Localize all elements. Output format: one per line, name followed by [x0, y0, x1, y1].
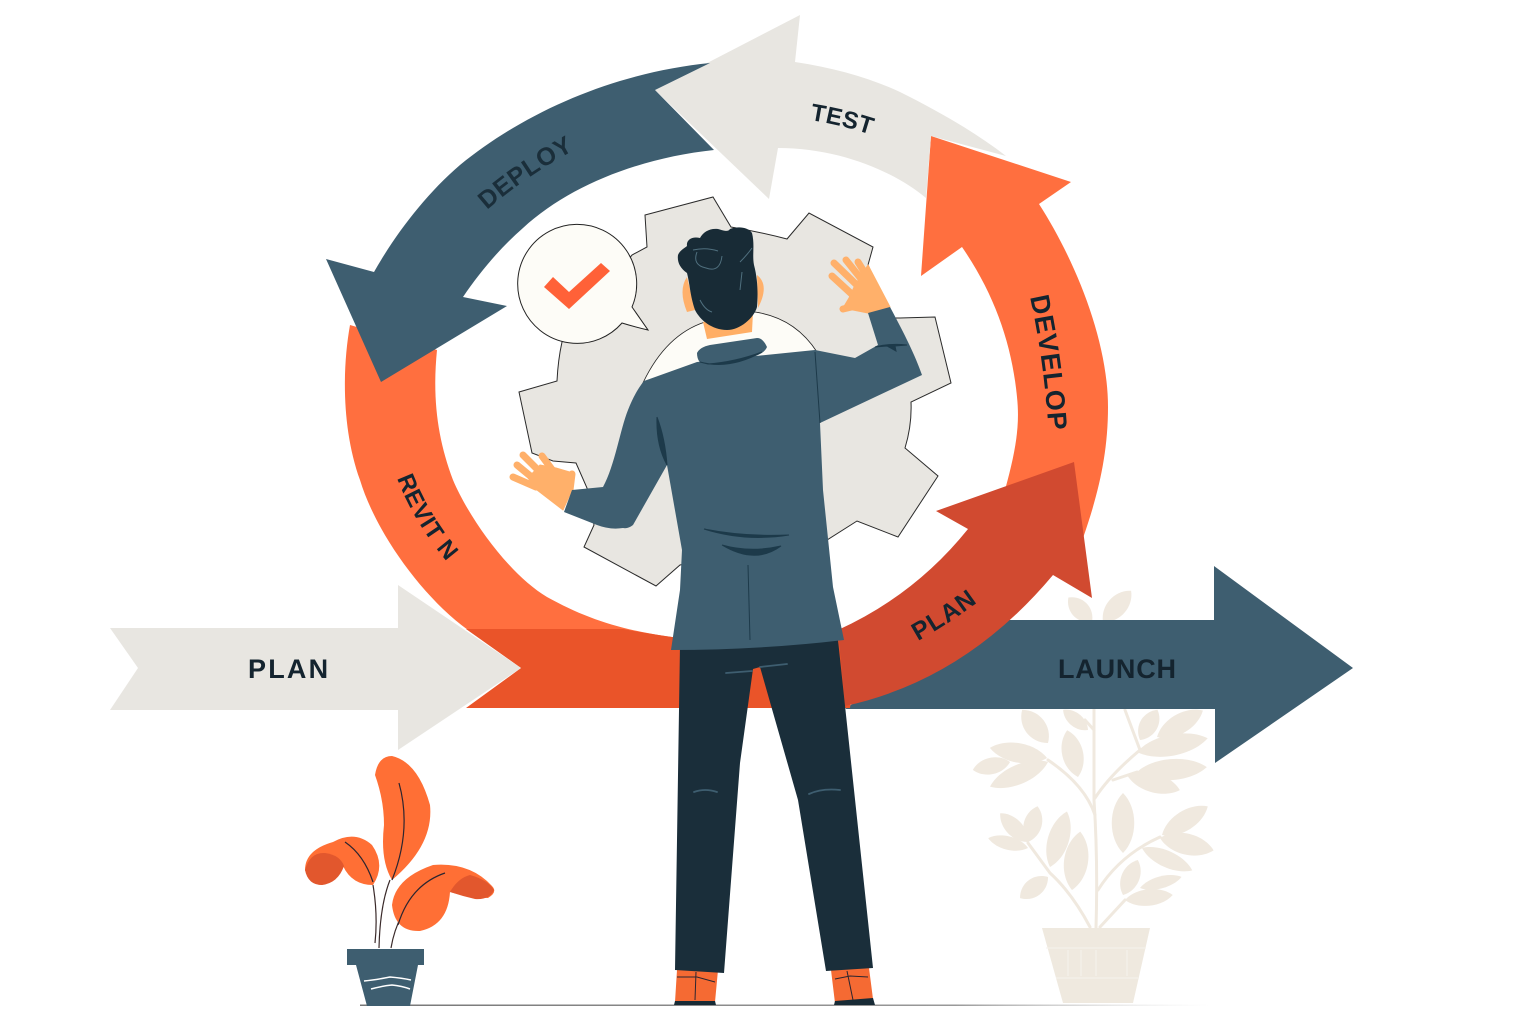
white shirt back	[642, 312, 817, 385]
person	[513, 227, 922, 1005]
plant pot	[1042, 928, 1150, 1003]
arrow: launch	[845, 566, 1353, 763]
icon: check mark	[544, 263, 610, 309]
arrow: review curved band	[344, 325, 850, 708]
gear	[519, 197, 951, 586]
label: test: TEST	[812, 104, 876, 133]
jacket	[564, 307, 922, 650]
label: review: REVIT N	[398, 473, 458, 560]
arrow: deploy	[326, 63, 714, 382]
hair	[678, 227, 758, 330]
arrow: develop	[921, 136, 1108, 538]
arrow: plan curved	[839, 462, 1092, 706]
ears	[682, 275, 764, 312]
neck	[703, 312, 753, 339]
leaf veins	[345, 783, 445, 925]
label: deploy: DEPLOY	[477, 136, 568, 209]
ground line	[360, 1004, 1210, 1006]
pot	[347, 949, 424, 1006]
jacket creases	[657, 344, 907, 640]
right leaf	[392, 865, 494, 931]
left leaf	[305, 837, 379, 885]
plant stems	[1028, 700, 1160, 928]
label: plan curved: PLAN	[910, 590, 976, 640]
center leaf	[375, 756, 430, 880]
label: develop: DEVELOP	[1030, 294, 1067, 429]
trousers	[675, 640, 873, 973]
shoes	[674, 968, 875, 1005]
trouser creases	[694, 664, 840, 794]
speech bubble with check mark	[518, 224, 648, 343]
label: plan entry: PLAN	[248, 654, 330, 684]
collar	[697, 338, 767, 366]
stems	[373, 880, 402, 948]
hands	[513, 260, 890, 510]
horizontal lower band	[466, 629, 860, 708]
right background plant	[971, 584, 1216, 1003]
plant leaves	[971, 584, 1216, 908]
arrow: plan entry	[110, 585, 521, 750]
left potted plant	[305, 756, 494, 1006]
label: launch: LAUNCH	[1058, 654, 1177, 684]
arrow: test	[655, 15, 1006, 199]
